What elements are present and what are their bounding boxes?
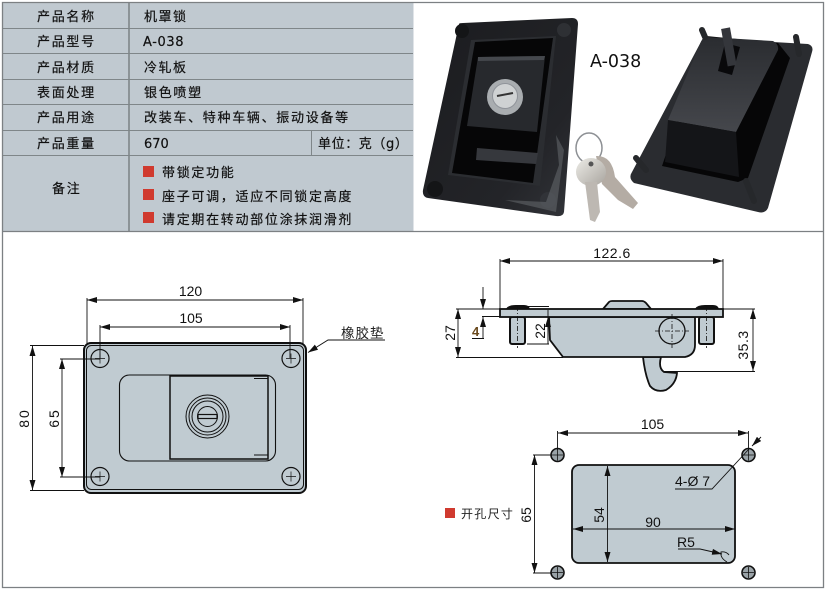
dimension: 27: 27: [442, 325, 458, 341]
photo: lock front: [423, 18, 578, 216]
dimension: 22: [527, 306, 549, 344]
dimension: 90: 90: [645, 514, 661, 530]
drawing: cutout view: [445, 416, 761, 579]
dimension: 120: 120: [179, 283, 202, 299]
dimension: 65: [46, 359, 100, 477]
dimension: 120: [87, 283, 303, 345]
corner holes: [551, 448, 755, 579]
callout: rubber gasket: [308, 325, 385, 352]
panel: product photo: [423, 18, 812, 222]
dimension: 80: [16, 346, 84, 490]
plate: [500, 309, 723, 317]
panel: specification table: [2, 3, 414, 231]
body: [549, 317, 695, 357]
remark 3: 请定期在转动部位涂抹润滑剂: [162, 212, 353, 228]
row: product name: 机罩锁: [144, 9, 188, 25]
row: product material: 冷轧板: [144, 61, 188, 76]
dimension: 35.3: [664, 309, 755, 372]
drawing: side view: [442, 245, 755, 391]
drawing: front view: [16, 283, 385, 493]
dimension: 4: [472, 287, 500, 339]
row: product use: 改装车、特种车辆、振动设备等: [144, 110, 350, 126]
label: cutout size: 开孔尺寸: [461, 507, 514, 521]
row: product use: [37, 110, 350, 126]
dimension: 27: [442, 309, 563, 358]
callout: 4-Ø7: [675, 437, 761, 489]
dimension: 35.3: 35.3: [735, 330, 751, 360]
dimension: 54: [591, 466, 608, 562]
row: surface treatment: [37, 85, 203, 101]
dimension: 80: 80: [16, 408, 32, 428]
remark 1: 带锁定功能: [162, 165, 236, 181]
photo: keys: [576, 133, 638, 222]
dimension: 22: 22: [532, 323, 548, 339]
cutout: [572, 465, 735, 563]
dimension: 65: [518, 455, 552, 573]
row: product name: [37, 9, 188, 25]
plate: [84, 343, 306, 493]
row: product material: 产品材质: [37, 61, 96, 76]
callout: R5: R5: [677, 534, 695, 550]
photo: model label: A-038: [590, 52, 641, 72]
dimension: 122.6: 122.6: [593, 245, 631, 261]
dimension: 105: [558, 416, 748, 450]
recess and handle: [120, 375, 276, 461]
row: product weight: [37, 136, 408, 152]
pivot hole: [518, 306, 706, 348]
row: surface treatment: 银色喷塑: [144, 85, 203, 101]
dimension: 105: 105: [179, 310, 203, 326]
dimension: 105: 105: [641, 416, 664, 432]
row: product use: 产品用途: [37, 110, 96, 126]
row: surface treatment: 表面处理: [37, 86, 96, 101]
dimension: 122.6: [500, 245, 723, 309]
row: product name: 产品名称: [37, 9, 96, 25]
dimension: 65: 65: [46, 408, 62, 428]
row: product weight: 产品重量: [37, 136, 96, 152]
row: product model: A-038: [143, 35, 184, 50]
hook: [643, 357, 677, 391]
dimension: 105: [100, 310, 290, 358]
row: product model: 产品型号: [37, 35, 96, 50]
dimension: 54: 54: [591, 507, 607, 523]
dimension: 65: 65: [518, 507, 534, 523]
mounting holes: [91, 350, 300, 486]
top tab: [603, 301, 651, 309]
lock cylinder: [186, 395, 229, 438]
remark 2: 座子可调，适应不同锁定高度: [162, 189, 353, 205]
row: product weight: 单位：克（g）: [318, 137, 408, 152]
dimension: 4: 4: [472, 324, 480, 339]
pins: [507, 306, 718, 344]
row: remarks label: 备注: [52, 181, 81, 197]
row: product model: [37, 35, 184, 50]
callout: R5: [677, 534, 729, 562]
callout: rubber gasket: 橡胶垫: [341, 325, 384, 342]
row: product material: [37, 61, 188, 76]
photo: lock back: [630, 27, 812, 212]
row: product weight: 670: [144, 137, 169, 152]
callout: 4-Ø7: 4-Ø 7: [675, 473, 710, 489]
